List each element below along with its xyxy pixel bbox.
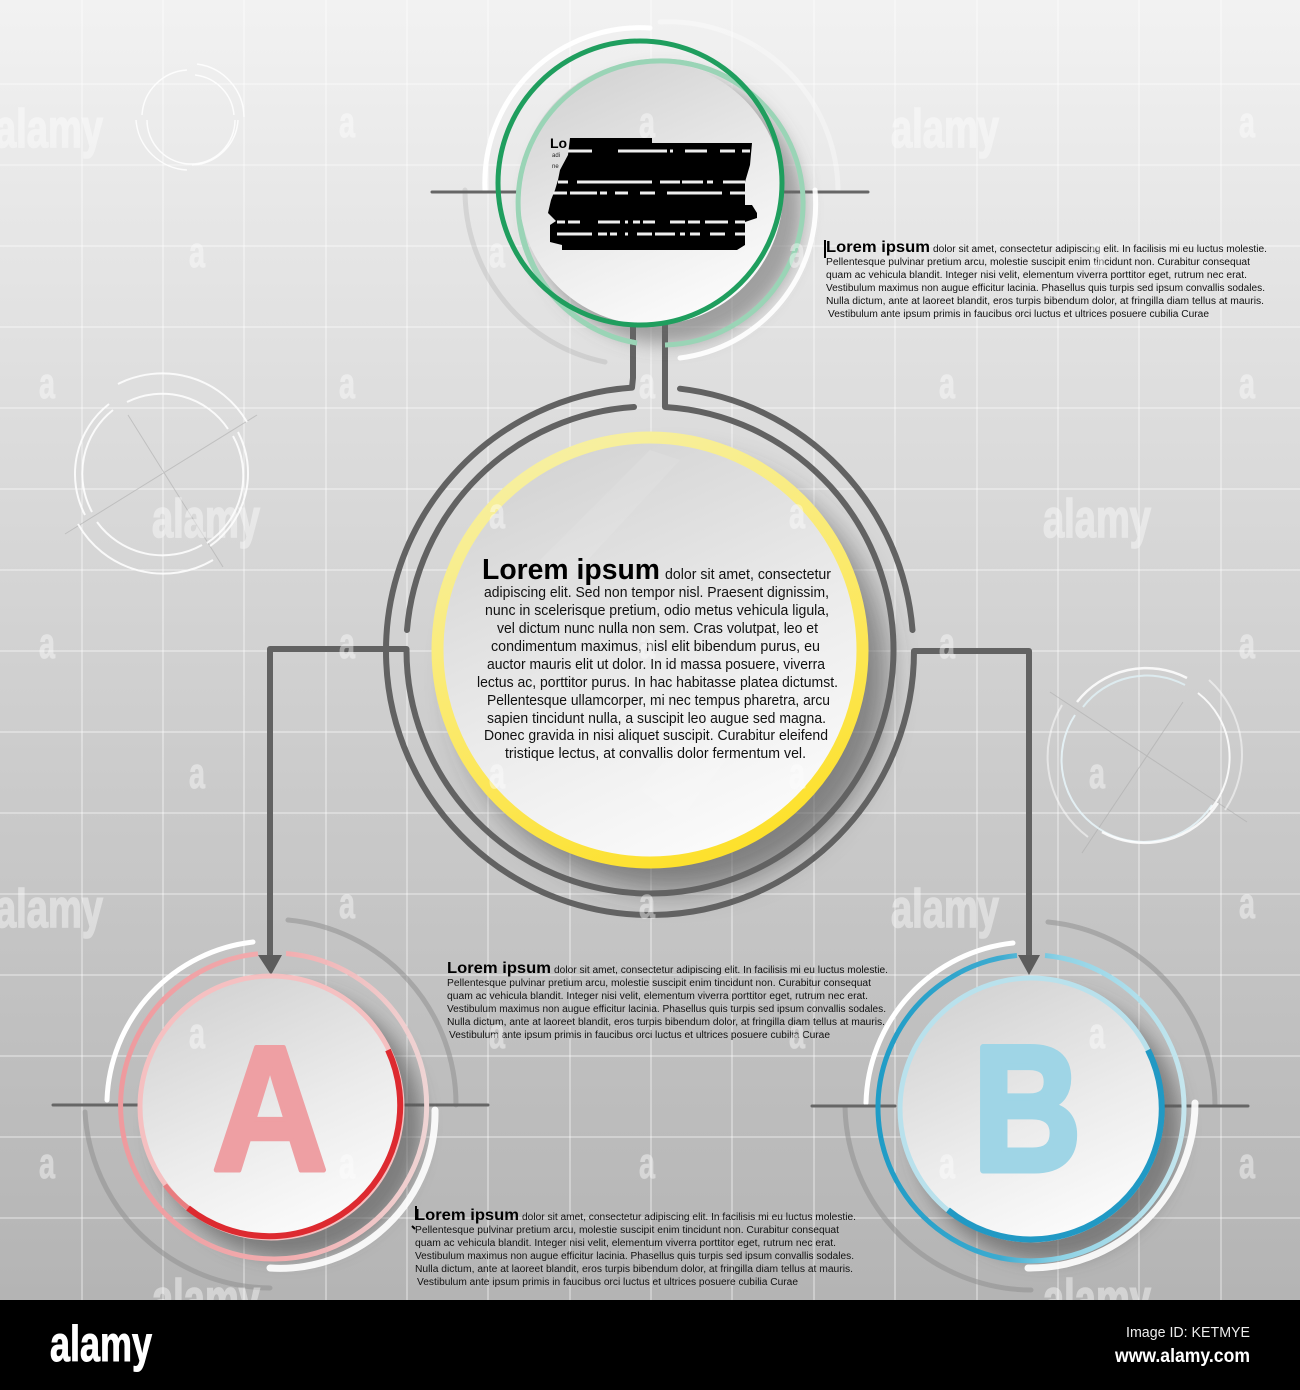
watermark small letters: a bbox=[789, 1009, 805, 1058]
decorative ring: right bbox=[1048, 668, 1247, 853]
text block: middle: Vestibulum maximus non augue efficitur lacinia. Phasellus quis turpis sed ipsum convallis sodales. bbox=[447, 1004, 886, 1015]
text block: top right bbox=[825, 239, 1267, 320]
circle: A red bbox=[53, 920, 488, 1288]
watermark words bbox=[0, 99, 1151, 1329]
watermark small letters: a bbox=[489, 749, 505, 798]
watermark small letters: a bbox=[339, 879, 355, 928]
text block: bottom: Vestibulum ante ipsum primis in faucibus orci luctus et ultrices posuere cubilia Curae bbox=[417, 1277, 798, 1288]
letter B: B bbox=[973, 1009, 1081, 1208]
watermark small letters: a bbox=[1089, 228, 1105, 277]
watermark small letters: a bbox=[639, 359, 655, 408]
circle: B blue bbox=[812, 922, 1248, 1290]
letter A: A bbox=[212, 1009, 328, 1208]
text block: top right: dolor sit amet, consectetur adipiscing elit. In facilisis mi eu luctus molestie. bbox=[933, 244, 1267, 255]
inner connector arc: top left bbox=[407, 407, 634, 630]
watermark words: alamy bbox=[1043, 489, 1151, 549]
text block: bottom: Lorem ipsum bbox=[415, 1207, 519, 1224]
redaction blot over top circle text: adi bbox=[552, 153, 560, 159]
watermark small letters: a bbox=[489, 228, 505, 277]
watermark small letters: a bbox=[339, 1139, 355, 1188]
watermark small letters bbox=[39, 98, 1255, 1188]
text block: top right: Nulla dictum, ante at laoreet blandit, eros turpis bibendum dolor, at fringilla diam tellus at mauris. bbox=[826, 296, 1264, 307]
text block: bottom: Nulla dictum, ante at laoreet blandit, eros turpis bibendum dolor, at fringilla diam tellus at mauris. bbox=[415, 1264, 853, 1275]
watermark small letters: a bbox=[489, 489, 505, 538]
website: www.alamy.com bbox=[1114, 1346, 1250, 1367]
watermark small letters: a bbox=[639, 98, 655, 147]
watermark small letters: a bbox=[789, 489, 805, 538]
watermark small letters: a bbox=[39, 1139, 55, 1188]
outer connector arc: top right bbox=[680, 389, 912, 630]
text block: bottom: Vestibulum maximus non augue efficitur lacinia. Phasellus quis turpis sed ipsum convallis sodales. bbox=[415, 1251, 854, 1262]
footer bar bbox=[0, 1300, 1300, 1390]
watermark words: alamy bbox=[152, 489, 260, 549]
watermark small letters: a bbox=[639, 879, 655, 928]
text: centre circle: Pellentesque ullamcorper, mi nec tempus pharetra, arcu bbox=[487, 693, 830, 709]
text: centre circle: auctor mauris elit ut dolor. In id massa posuere, viverra bbox=[487, 657, 826, 673]
outer connector ring and arrow to B bbox=[386, 325, 1040, 975]
watermark words: alamy bbox=[891, 879, 999, 939]
redaction blot over top circle text bbox=[548, 135, 757, 250]
watermark small letters: a bbox=[1239, 1139, 1255, 1188]
text block: bottom: quam ac vehicula blandit. Integer nisi velit, elementum viverra porttitor eget, rutrum nec erat. bbox=[415, 1238, 836, 1249]
text block: middle: quam ac vehicula blandit. Integer nisi velit, elementum viverra porttitor eget, rutrum nec erat. bbox=[447, 991, 868, 1002]
watermark small letters: a bbox=[789, 749, 805, 798]
watermark small letters: a bbox=[489, 1009, 505, 1058]
centre circle shadow bbox=[456, 459, 888, 891]
watermark small letters: a bbox=[339, 98, 355, 147]
text: centre circle: condimentum maximus, nisl elit bibendum purus, eu bbox=[491, 639, 820, 655]
text: centre circle: nunc in scelerisque pretium, odio metus vehicula ligula, bbox=[485, 603, 829, 619]
circle: top green bbox=[432, 22, 868, 362]
watermark small letters: a bbox=[939, 359, 955, 408]
watermark small letters: a bbox=[939, 619, 955, 668]
watermark small letters: a bbox=[789, 228, 805, 277]
image id: Image ID: KETMYE bbox=[1126, 1324, 1250, 1341]
text block: top right: quam ac vehicula blandit. Integer nisi velit, elementum viverra porttitor eget, rutrum nec erat. bbox=[826, 270, 1247, 281]
text: centre circle: adipiscing elit. Sed non tempor nisl. Praesent dignissim, bbox=[484, 585, 829, 601]
redaction blot over top circle text: ne bbox=[552, 164, 559, 170]
watermark small letters: a bbox=[189, 749, 205, 798]
text: centre circle: Donec gravida in nisi aliquet suscipit. Curabitur eleifend bbox=[484, 728, 828, 744]
text: centre circle bbox=[477, 554, 838, 762]
text block: middle: dolor sit amet, consectetur adipiscing elit. In facilisis mi eu luctus molestie. bbox=[554, 965, 888, 976]
decorative ring: left bbox=[65, 373, 257, 574]
watermark small letters: a bbox=[1239, 359, 1255, 408]
watermark words: alamy bbox=[152, 1269, 260, 1329]
text: centre circle: vel dictum nunc nulla non sem. Cras volutpat, leo et bbox=[497, 621, 818, 637]
watermark small letters: a bbox=[1239, 619, 1255, 668]
text block: middle: Nulla dictum, ante at laoreet blandit, eros turpis bibendum dolor, at fringilla diam tellus at mauris. bbox=[447, 1017, 885, 1028]
text block: top right: Lorem ipsum bbox=[826, 239, 930, 256]
watermark small letters: a bbox=[939, 1139, 955, 1188]
text block: bottom: Pellentesque pulvinar pretium arcu, molestie suscipit enim tincidunt non. Curabitur consequat bbox=[415, 1225, 839, 1236]
text block: top right: Vestibulum maximus non augue efficitur lacinia. Phasellus quis turpis sed ipsum convallis sodales. bbox=[826, 283, 1265, 294]
watermark small letters: a bbox=[1089, 1009, 1105, 1058]
watermark small letters: a bbox=[189, 1009, 205, 1058]
text block: top right: Pellentesque pulvinar pretium arcu, molestie suscipit enim tincidunt non. Curabitur consequat bbox=[826, 257, 1250, 268]
text block: middle: Lorem ipsum bbox=[447, 960, 551, 977]
text: centre circle: lectus ac, porttitor purus. In hac habitasse platea dictumst. bbox=[477, 675, 838, 691]
text block: middle: Pellentesque pulvinar pretium arcu, molestie suscipit enim tincidunt non. Curabitur consequat bbox=[447, 978, 871, 989]
text: centre circle: Lorem ipsum bbox=[482, 554, 660, 586]
text block: bottom bbox=[412, 1206, 856, 1288]
redaction blot over top circle text: Lo bbox=[550, 135, 567, 151]
watermark small letters: a bbox=[639, 619, 655, 668]
watermark words: alamy bbox=[891, 99, 999, 159]
watermark small letters: a bbox=[339, 359, 355, 408]
footer logo: alamy bbox=[50, 1316, 152, 1372]
watermark small letters: a bbox=[1239, 98, 1255, 147]
text block: top right: Vestibulum ante ipsum primis in faucibus orci luctus et ultrices posuere cubilia Curae bbox=[828, 309, 1209, 320]
text: centre circle: tristique lectus, at convallis dolor fermentum vel. bbox=[505, 746, 806, 762]
watermark small letters: a bbox=[189, 228, 205, 277]
text: centre circle: dolor sit amet, consectetur bbox=[665, 567, 831, 583]
text block: middle bbox=[447, 960, 888, 1041]
decorative ring: top left bbox=[136, 64, 244, 170]
text block: middle: Vestibulum ante ipsum primis in faucibus orci luctus et ultrices posuere cubilia Curae bbox=[449, 1030, 830, 1041]
inner connector ring and arrow to A bbox=[258, 325, 893, 975]
watermark small letters: a bbox=[1089, 749, 1105, 798]
watermark small letters: a bbox=[39, 619, 55, 668]
text: centre circle: sapien tincidunt nulla, a suscipit leo augue sed magna. bbox=[487, 711, 826, 727]
text block: bottom: dolor sit amet, consectetur adipiscing elit. In facilisis mi eu luctus molestie. bbox=[522, 1212, 856, 1223]
watermark words: alamy bbox=[1043, 1269, 1151, 1329]
watermark small letters: a bbox=[339, 619, 355, 668]
circle: centre bbox=[438, 438, 862, 862]
watermark small letters: a bbox=[39, 359, 55, 408]
watermark small letters: a bbox=[1239, 879, 1255, 928]
watermark small letters: a bbox=[639, 1139, 655, 1188]
